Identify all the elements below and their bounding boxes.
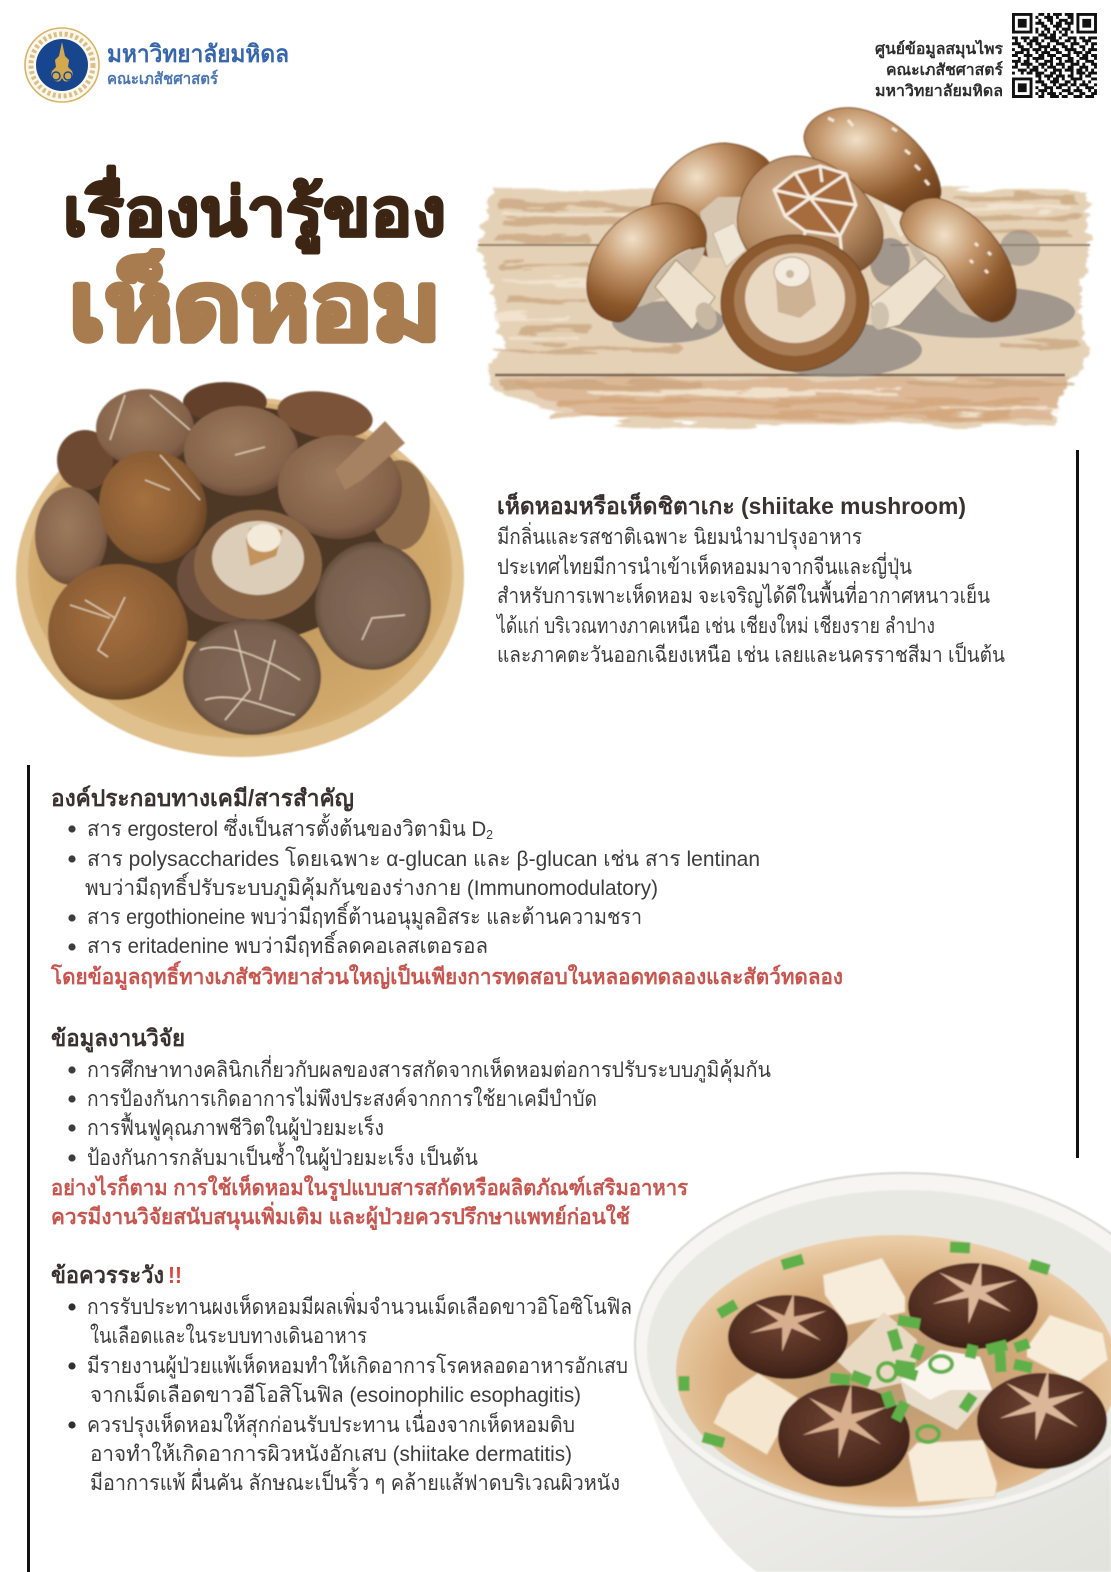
icon: university seal — [25, 28, 99, 102]
text block: intro: ได้แก่ บริเวณทางภาคเหนือ เช่น เชียงใหม่ เชียงราย ลำปาง — [495, 613, 935, 638]
heading: precautions: ข้อควรระวัง — [51, 1262, 164, 1288]
shadows under mushrooms — [612, 230, 1075, 377]
text block: research: ป้องกันการกลับมาเป็นซ้ำในผู้ป่วยมะเร็ง เป็นต้น — [87, 1142, 478, 1171]
header credit text: มหาวิทยาลัยมหิดล — [875, 82, 1003, 100]
text block: precautions: มีอาการแพ้ ผื่นคัน ลักษณะเป็นริ้ว ๆ คล้ายแส้ฟาดบริเวณผิวหนัง — [90, 1467, 620, 1495]
text block: research: การป้องกันการเกิดอาการไม่พึงประสงค์จากการใช้ยาเคมีบำบัด — [87, 1086, 597, 1111]
intro heading: เห็ดหอมหรือเห็ดชิตาเกะ (shiitake mushroom) — [497, 491, 966, 519]
text block: precautions: การรับประทานผงเห็ดหอมมีผลเพิ่มจำนวนเม็ดเลือดขาวอิโอซิโนฟิล — [87, 1292, 632, 1319]
text block: precautions: ควรปรุงเห็ดหอมให้สุกก่อนรับประทาน เนื่องจากเห็ดหอมดิบ — [87, 1410, 575, 1438]
text block: intro: มีกลิ่นและรสชาติเฉพาะ นิยมนำมาปรุงอาหาร — [497, 522, 862, 550]
text block: chemical constituents: สาร ergothioneine พบว่ามีฤทธิ์ต้านอนุมูลอิสระ และต้านความชรา — [87, 901, 642, 930]
text block: precautions: จากเม็ดเลือดขาวอีโอสิโนฟิล (esoinophilic esophagitis) — [90, 1380, 581, 1407]
text block: chemical constituents: สาร ergosterol ซึ่งเป็นสารตั้งต้นของวิตามิน D — [87, 817, 509, 841]
text block: precautions: ในเลือดและในระบบทางเดินอาหาร — [90, 1323, 367, 1348]
text block: intro: ประเทศไทยมีการนำเข้าเห็ดหอมมาจากจีนและญี่ปุ่น — [497, 552, 912, 580]
mushroom veins — [70, 395, 405, 720]
text block: intro: สำหรับการเพาะเห็ดหอม จะเจริญได้ดีในพื้นที่อากาศหนาวเย็น — [497, 580, 990, 608]
wooden table wash — [480, 190, 1090, 425]
bowl — [635, 1173, 1111, 1572]
title — [63, 165, 446, 359]
note: research caveat: อย่างไรก็ตาม การใช้เห็ดหอมในรูปแบบสารสกัดหรือผลิตภัณฑ์เสริมอาหาร — [51, 1173, 688, 1202]
text block: research — [51, 1025, 771, 1231]
broth — [676, 1235, 1111, 1507]
mushroom: back right — [804, 108, 941, 237]
tofu cubes — [713, 1258, 1108, 1502]
note: evidence caveat: โดยข้อมูลฤทธิ์ทางเภสัชวิทยาส่วนใหญ่เป็นเพียงการทดสอบในหลอดทดลองและสัตว์ทดลอง — [50, 960, 843, 991]
divider: right vertical rule — [1076, 450, 1079, 1158]
mushroom: center with cracked cap — [737, 156, 883, 272]
logo text: faculty: คณะเภสัชศาสตร์ — [107, 69, 218, 88]
header credit text: ศูนย์ข้อมูลสมุนไพร — [875, 39, 1004, 60]
text block: research: การศึกษาทางคลินิกเกี่ยวกับผลของสารสกัดจากเห็ดหอมต่อการปรับระบบภูมิคุ้มกัน — [87, 1055, 771, 1083]
text block: chemical constituents: สาร polysaccharides โดยเฉพาะ α-glucan และ β-glucan เช่น สาร lentinan — [87, 846, 760, 871]
shiitake caps — [728, 1256, 1107, 1487]
text block: intro — [495, 491, 1005, 667]
wooden plate — [16, 397, 464, 757]
text block: chemical constituents: สาร eritadenine พบว่ามีฤทธิ์ลดคอเลสเตอรอล — [87, 930, 488, 958]
text block: chemical constituents — [50, 785, 843, 991]
mushroom: back left — [651, 143, 771, 267]
text block: chemical constituents: พบว่ามีฤทธิ์ปรับระบบภูมิคุ้มกันของร่างกาย (Immunomodulatory) — [85, 872, 658, 901]
photo: dried shiitake on wooden plate — [16, 382, 464, 757]
header credit text: คณะเภสัชศาสตร์ — [886, 61, 1004, 79]
text block: precautions: มีรายงานผู้ป่วยแพ้เห็ดหอมทำให้เกิดอาการโรคหลอดอาหารอักเสบ — [87, 1351, 628, 1379]
logo: Mahidol University seal and name — [25, 28, 289, 102]
mushroom: front underside — [721, 235, 869, 371]
heading: constituents: องค์ประกอบทางเคมี/สารสำคัญ — [51, 785, 354, 812]
text block: research: ควรมีงานวิจัยสนับสนุนเพิ่มเติม และผู้ป่วยควรปรึกษาแพทย์ก่อนใช้ — [51, 1201, 630, 1231]
header credit text — [875, 39, 1004, 100]
QR code — [1012, 13, 1097, 98]
heading: research: ข้อมูลงานวิจัย — [51, 1025, 185, 1053]
illustration: watercolor mushrooms on wood — [478, 108, 1090, 425]
mushroom: left — [587, 203, 720, 333]
title: เห็ดหอม — [69, 249, 441, 359]
title: เรื่องน่ารู้ของ — [63, 165, 446, 254]
text block: research: การฟื้นฟูคุณภาพชีวิตในผู้ป่วยมะเร็ง — [87, 1112, 384, 1141]
mushroom pile — [35, 382, 431, 735]
text block: precautions — [51, 1262, 632, 1495]
text block: intro: และภาคตะวันออกเฉียงเหนือ เช่น เลยและนครราชสีมา เป็นต้น — [497, 640, 1005, 667]
text block: chemical constituents: 2 — [486, 827, 493, 842]
icon: warning marks: !! — [168, 1262, 182, 1288]
text block: precautions: อาจทำให้เกิดอาการผิวหนังอักเสบ (shiitake dermatitis) — [90, 1441, 572, 1466]
logo text: university: มหาวิทยาลัยมหิดล — [107, 41, 289, 68]
mushroom: right — [871, 198, 1016, 330]
green onions — [684, 1247, 1049, 1443]
illustration: shiitake tofu soup bowl — [635, 1173, 1111, 1572]
divider: left vertical rule — [27, 765, 30, 1572]
